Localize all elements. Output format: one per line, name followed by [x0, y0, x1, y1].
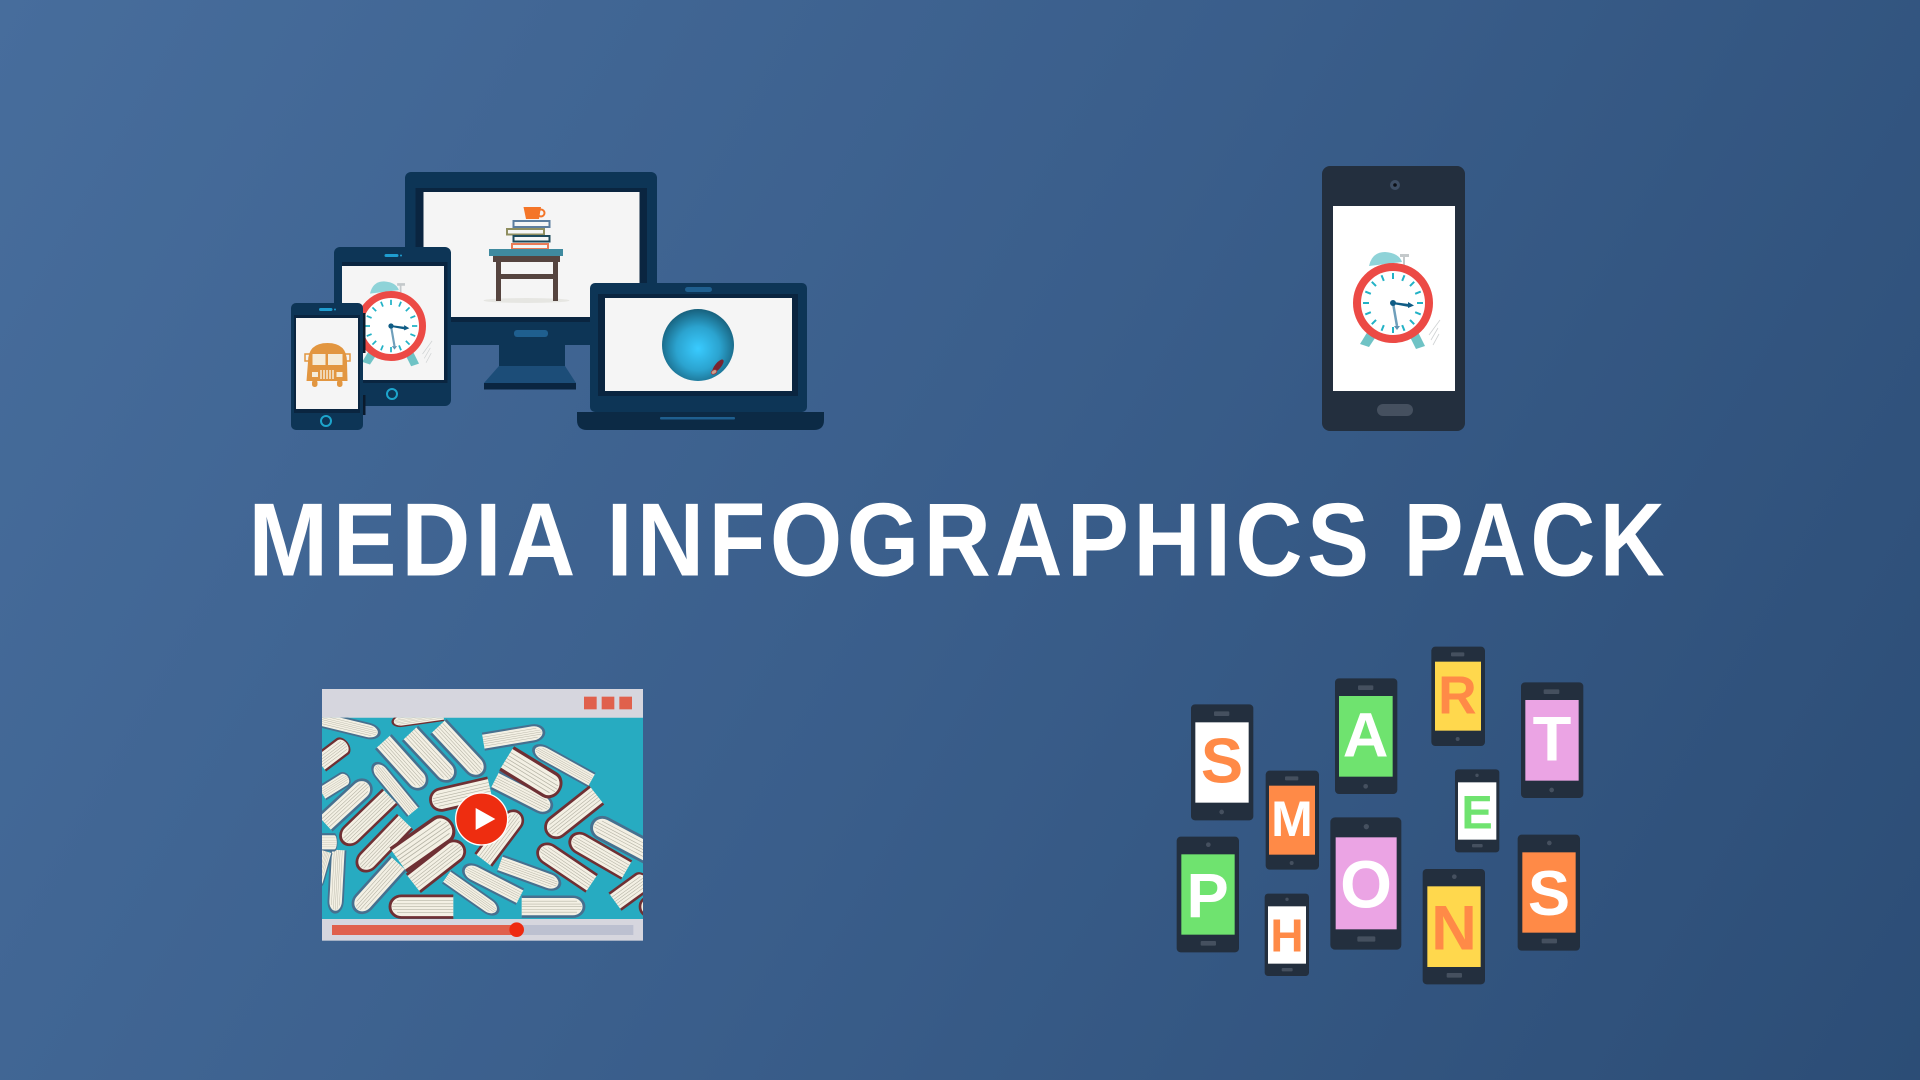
video thumbnail: pile of books: [322, 718, 643, 919]
phone letter S: [1191, 704, 1253, 820]
laptop: [577, 283, 824, 430]
phone letter O: [1330, 817, 1401, 950]
phone letter T: [1521, 682, 1583, 798]
play button: [456, 793, 508, 845]
phone letter H: [1265, 894, 1309, 976]
illustration: responsive devices: [291, 172, 824, 430]
phone letter R: R: [1438, 666, 1477, 725]
icon: alarm clock: [360, 281, 432, 366]
icon: alarm clock large: [1357, 252, 1440, 349]
phone letter E: E: [1461, 785, 1493, 838]
phone letter H: H: [1270, 910, 1304, 962]
icon: globe with rocket: [662, 309, 734, 381]
monitor: [405, 172, 657, 390]
illustration: phone with alarm clock: [1322, 166, 1465, 431]
illustration: video player with books: [311, 689, 660, 941]
phone letter M: [1266, 771, 1319, 870]
phone letter S second: [1518, 835, 1580, 951]
tablet: [334, 247, 451, 406]
phone letter A: [1335, 678, 1397, 794]
phone letter T: T: [1533, 705, 1571, 775]
window buttons: [584, 697, 632, 709]
progress bar: [332, 922, 633, 937]
title: PACK: [1404, 482, 1669, 598]
phone with bus: [291, 303, 366, 430]
illustration: smartphones letter phones: [1177, 647, 1583, 984]
icon: coffee cup on books and table: [484, 207, 570, 303]
phone letter E: [1455, 769, 1499, 852]
icon: school bus: [305, 343, 350, 387]
phone letter P: P: [1187, 861, 1229, 931]
phone letter A: A: [1343, 701, 1389, 771]
phone letter P: [1177, 837, 1239, 952]
phone letter N: N: [1431, 893, 1477, 963]
phone letter O: O: [1340, 848, 1392, 922]
phone letter S second: S: [1528, 859, 1570, 929]
phone letter S: S: [1201, 726, 1243, 796]
title: MEDIA: [248, 482, 576, 598]
phone letter N: [1423, 869, 1485, 984]
phone letter R: [1431, 647, 1485, 746]
title: INFOGRAPHICS: [607, 482, 1374, 598]
video window frame: [322, 689, 643, 941]
phone letter M: M: [1271, 791, 1313, 847]
